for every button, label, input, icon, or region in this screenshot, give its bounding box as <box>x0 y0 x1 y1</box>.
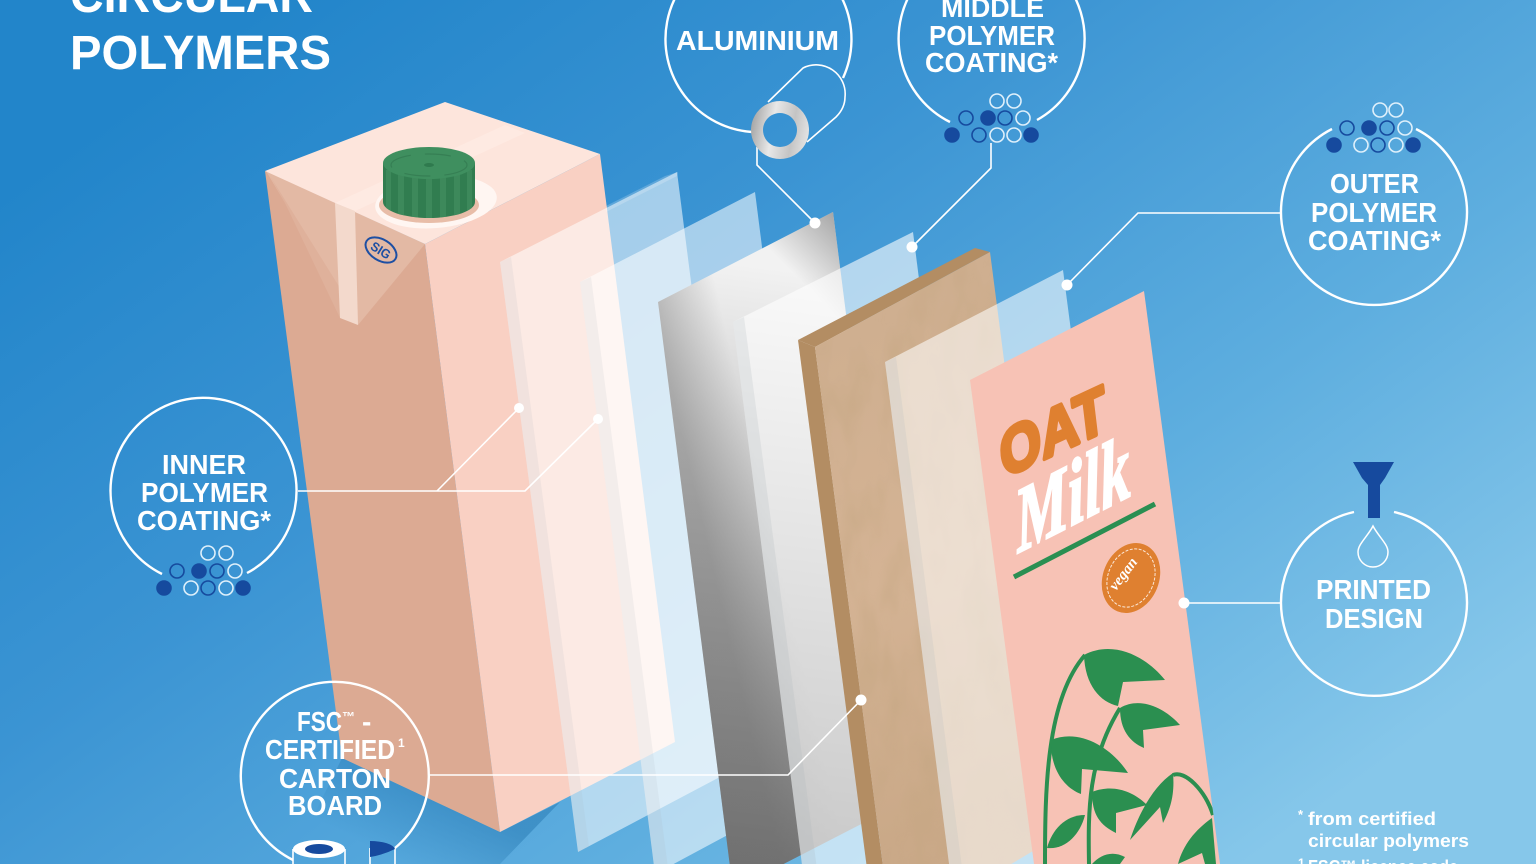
icon: polymer molecules <box>945 94 1038 142</box>
carton fold triangle <box>266 171 425 325</box>
carton seam <box>335 125 525 211</box>
callout: FSC-certified carton board: CARTON <box>279 763 391 794</box>
vegan badge: vegan <box>1106 555 1141 594</box>
leader line: middle polymer coating <box>906 143 991 252</box>
carton package <box>265 102 675 832</box>
leader line: inner polymer coating <box>298 403 603 491</box>
callout: outer polymer coating: COATING* <box>1308 225 1441 256</box>
callout: inner polymer coating <box>111 398 297 595</box>
leader line: carton board <box>429 694 866 775</box>
layer: middle polymer coating <box>733 232 988 864</box>
icon: green cap <box>383 147 475 225</box>
leader line: outer polymer coating <box>1062 213 1281 290</box>
Milk wordmark: Milk <box>1010 414 1134 573</box>
callout: FSC-certified carton board: FSC <box>297 706 342 737</box>
layer: carton board <box>798 248 1065 864</box>
footnotes: circular polymers <box>1308 831 1469 851</box>
oat plant illustration <box>1045 649 1216 864</box>
vegan badge <box>1092 534 1170 622</box>
callout: FSC-certified carton board: - <box>362 706 371 737</box>
layer: printed design <box>970 291 1220 864</box>
layer: outer polymer coating <box>885 270 1140 864</box>
icon: SIG logo <box>361 232 401 268</box>
callout: inner polymer coating: INNER <box>162 449 246 480</box>
icon: ink drop <box>1358 526 1388 567</box>
layer: inner polymer coating B <box>580 192 830 864</box>
callout: printed design: DESIGN <box>1325 603 1423 634</box>
callout: FSC-certified carton board: 1 <box>398 736 405 750</box>
icon: SIG logo: SIG <box>368 238 394 262</box>
callout: middle polymer coating <box>899 0 1085 142</box>
callout: printed design <box>1281 462 1467 696</box>
callout: FSC-certified carton board: BOARD <box>288 790 382 821</box>
callout: outer polymer coating <box>1281 103 1467 305</box>
icon: polymer molecules <box>157 546 250 595</box>
callout: outer polymer coating: POLYMER <box>1311 197 1437 228</box>
icon: aluminium roll <box>751 65 845 159</box>
layer: aluminium <box>658 212 908 864</box>
layer: inner polymer coating A <box>500 172 752 852</box>
carton left face <box>265 171 500 832</box>
OAT wordmark: OAT <box>996 371 1110 492</box>
icon: print nozzle <box>1353 462 1394 518</box>
callout: aluminium <box>665 0 851 159</box>
footnotes: * <box>1298 807 1304 822</box>
callout: printed design: PRINTED <box>1316 574 1431 605</box>
callout: middle polymer coating: POLYMER <box>929 20 1055 51</box>
icon: polymer molecules <box>1327 103 1420 152</box>
callout: middle polymer coating: COATING* <box>925 47 1058 78</box>
callout: FSC-certified carton board: ™ <box>342 709 355 724</box>
callout: outer polymer coating: OUTER <box>1330 168 1419 199</box>
callout: inner polymer coating: COATING* <box>137 505 271 536</box>
green rule <box>1014 504 1155 577</box>
carton shadow <box>290 758 560 864</box>
leader line: aluminium <box>757 147 820 228</box>
callout: FSC-certified carton board <box>241 682 429 864</box>
callout: aluminium: ALUMINIUM <box>676 25 839 56</box>
leader line: printed design <box>1178 598 1281 608</box>
carton top face <box>265 102 600 244</box>
callout: FSC-certified carton board: CERTIFIED <box>265 734 395 765</box>
icon: board rolls <box>293 840 395 864</box>
title <box>70 0 331 80</box>
footnotes: from certified <box>1308 809 1436 829</box>
opening base <box>373 171 499 233</box>
carton right face <box>425 154 675 832</box>
footnotes <box>1298 807 1469 864</box>
callout: inner polymer coating: POLYMER <box>141 477 268 508</box>
title: POLYMERS <box>70 27 331 80</box>
